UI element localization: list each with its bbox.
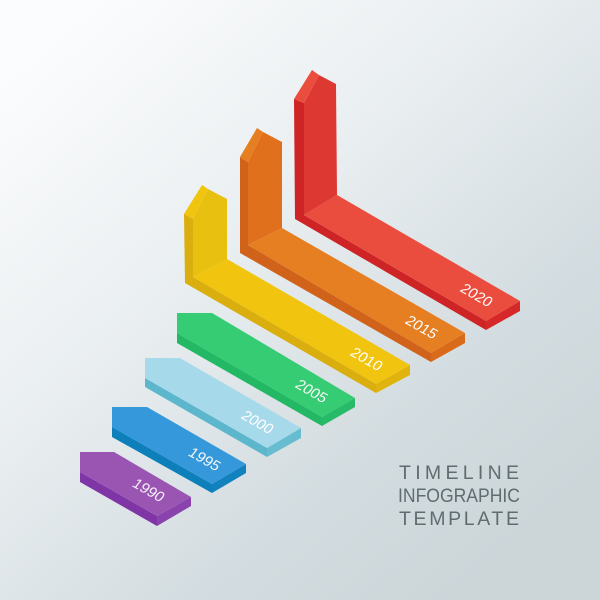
L-shaped arrow: 2015 orange (240, 128, 465, 362)
label: 2010: 2010 (347, 345, 385, 375)
arrow: 2005 green (177, 313, 355, 426)
label: 1995: 1995 (185, 445, 223, 475)
arrow: 1990 purple (80, 452, 191, 526)
arrow: 2000 light blue (145, 358, 301, 457)
title: TIMELINE (399, 462, 519, 484)
L-shaped arrow: 2010 yellow (184, 185, 410, 393)
title: INFOGRAPHIC (398, 485, 520, 507)
label: 1990: 1990 (129, 476, 167, 506)
label: 2005: 2005 (292, 377, 330, 407)
label: 2000: 2000 (238, 408, 276, 438)
arrow: 1995 blue (112, 407, 246, 493)
title (398, 462, 520, 530)
title: TEMPLATE (399, 508, 519, 530)
L-shaped arrow: 2020 red (294, 70, 520, 330)
label: 2020: 2020 (457, 281, 495, 311)
label: 2015: 2015 (402, 313, 440, 343)
